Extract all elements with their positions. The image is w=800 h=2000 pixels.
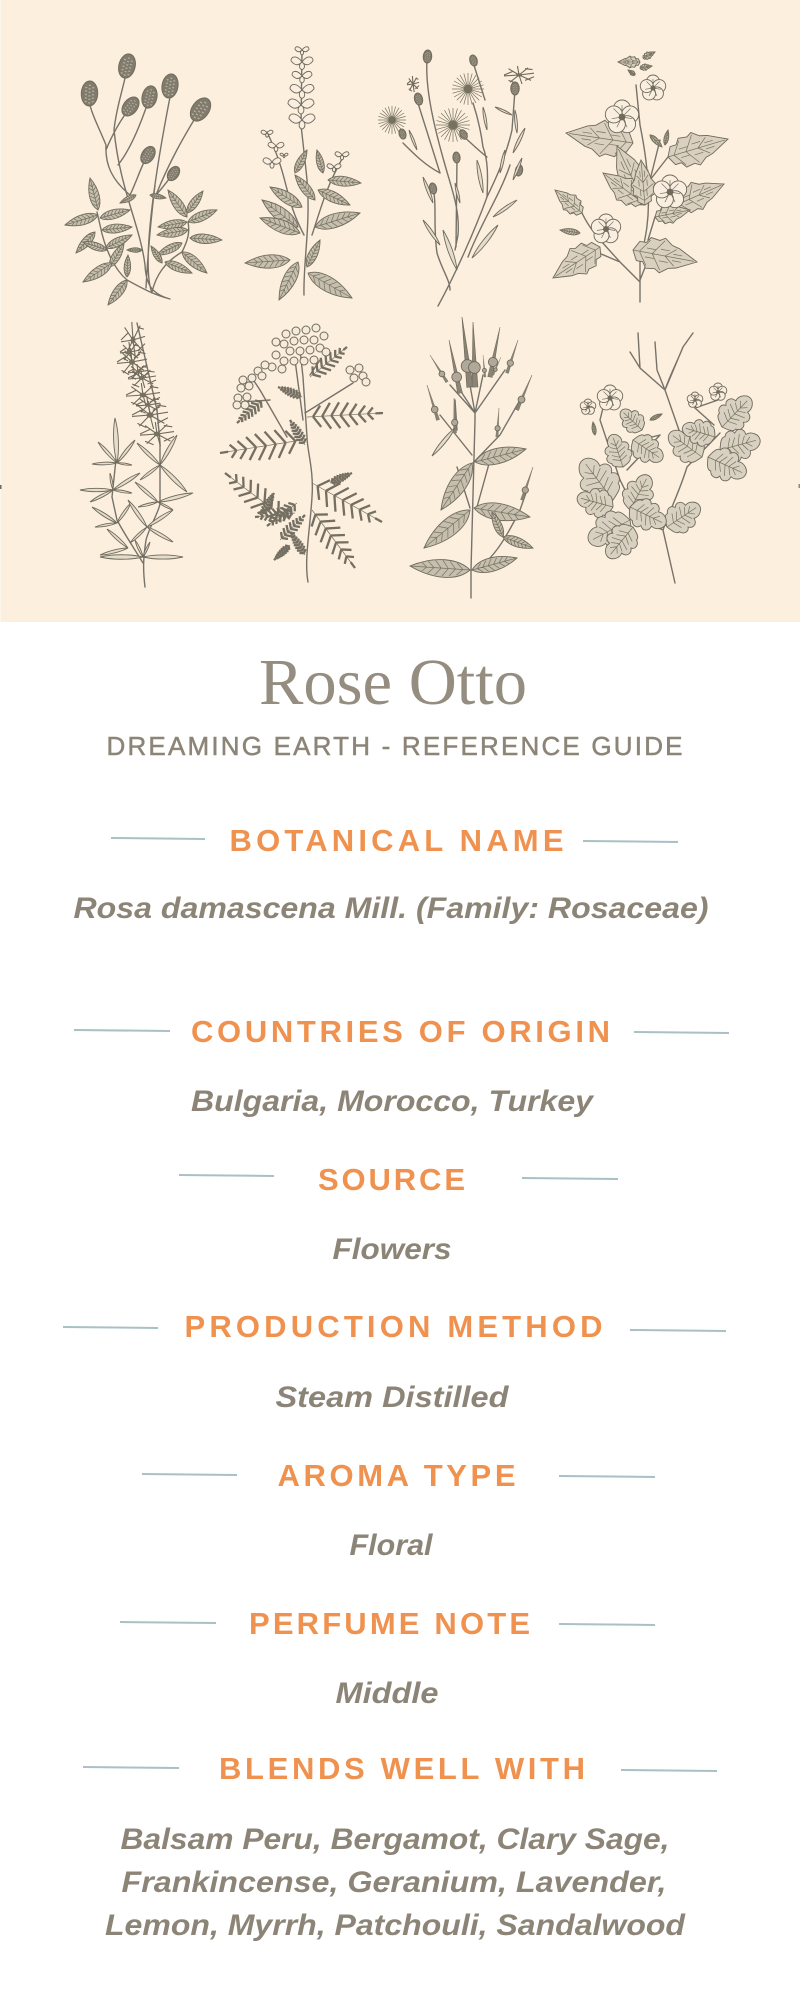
section: countries of origin: COUNTRIES OF ORIGIN: [191, 1014, 610, 1049]
illustration: clary sage plant: [245, 47, 362, 304]
section: source: [179, 1162, 618, 1266]
section: botanical name: Rosa damascena Mill. (Family: Rosaceae): [74, 892, 709, 925]
section: production method: PRODUCTION METHOD: [184, 1309, 602, 1344]
subtitle: DREAMING EARTH - REFERENCE GUIDE: [106, 731, 682, 761]
section: perfume note: Middle: [336, 1677, 438, 1710]
section: blends well with: [83, 1751, 717, 1942]
title: Rose Otto: [259, 646, 527, 719]
section: aroma type: [142, 1458, 655, 1562]
section: perfume note: [120, 1606, 655, 1710]
section: production method: Steam Distilled: [276, 1381, 509, 1414]
section: perfume note: PERFUME NOTE: [249, 1606, 530, 1641]
illustration: tansy plant: [218, 324, 389, 582]
illustration: burnet plant: [64, 52, 222, 308]
section: aroma type: Floral: [350, 1529, 433, 1562]
section: blends well with: BLENDS WELL WITH: [219, 1751, 585, 1786]
section: countries of origin: [74, 1014, 729, 1118]
section: source: Flowers: [332, 1233, 452, 1266]
section: source: SOURCE: [318, 1162, 465, 1197]
section: countries of origin: Bulgaria, Morocco, Turkey: [191, 1085, 594, 1118]
section: blends well with: Frankincense, Geranium, Lavender,: [122, 1866, 666, 1899]
panel: botanical illustration banner: [0, 0, 800, 622]
illustration: mallow plant: [545, 49, 733, 302]
illustration: cornflower plant: [378, 50, 534, 306]
illustration: celandine plant: [568, 333, 764, 583]
section: botanical name: [74, 823, 709, 925]
section: blends well with: Lemon, Myrrh, Patchouli, Sandalwood: [105, 1909, 686, 1942]
section: aroma type: AROMA TYPE: [278, 1458, 516, 1493]
section: botanical name: BOTANICAL NAME: [230, 823, 564, 858]
illustration: vervain plant: [409, 316, 536, 598]
section: blends well with: Balsam Peru, Bergamot, Clary Sage,: [120, 1823, 670, 1856]
illustration: hyssop plant: [80, 322, 193, 587]
section: production method: [63, 1309, 726, 1414]
